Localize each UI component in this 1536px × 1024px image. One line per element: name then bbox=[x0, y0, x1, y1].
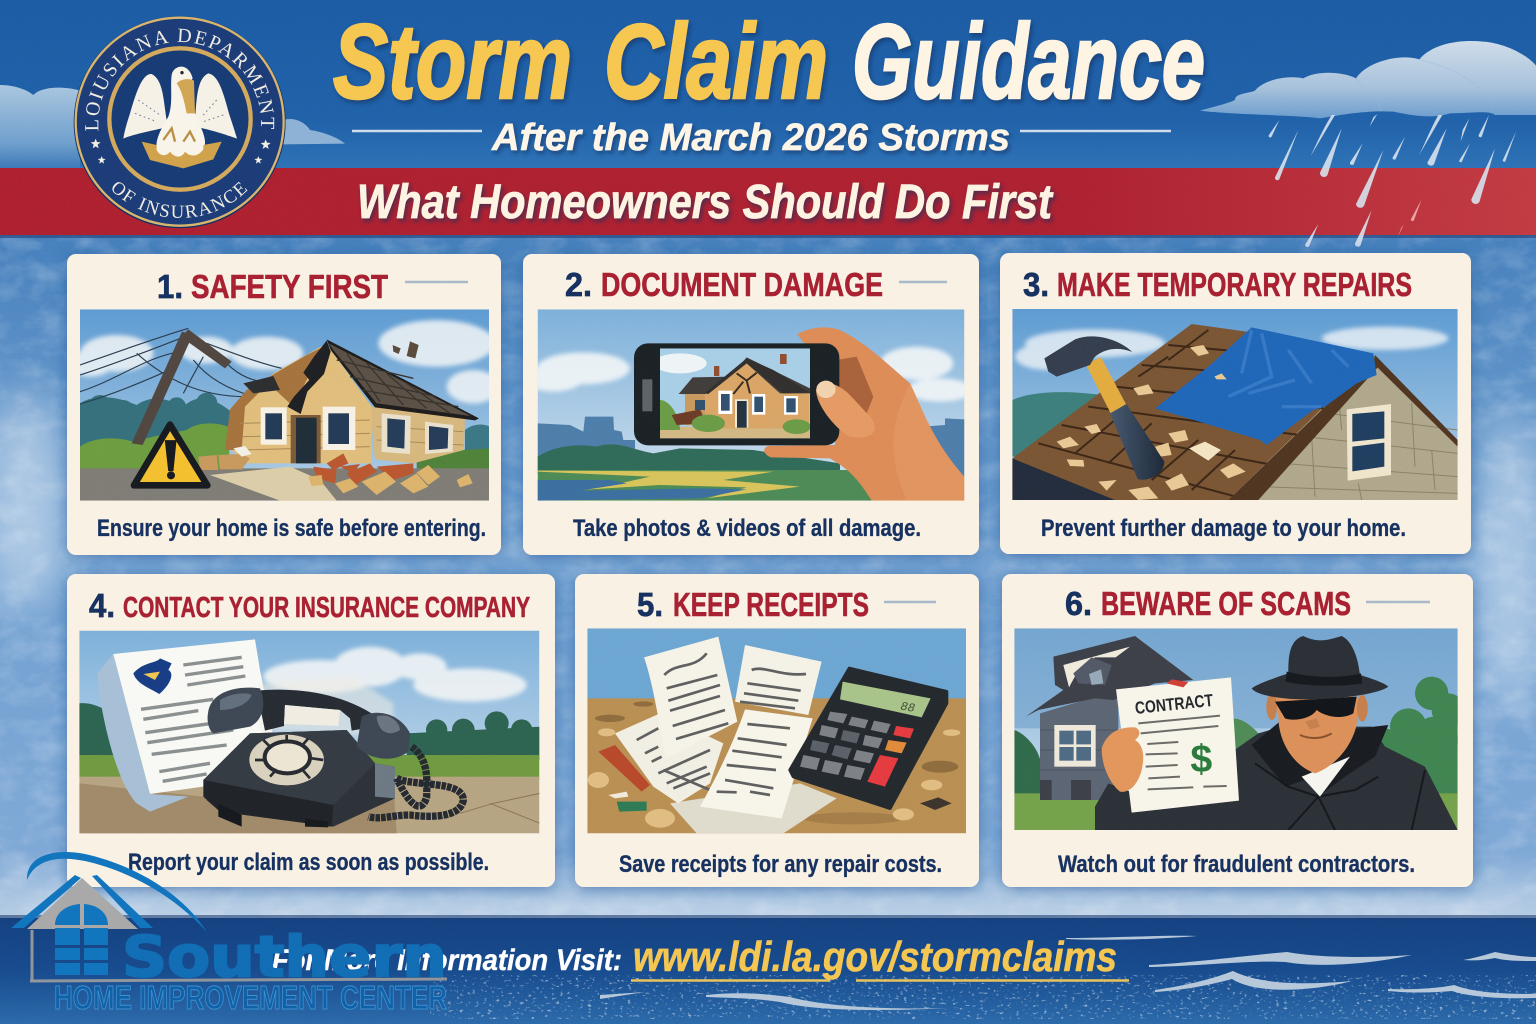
panel 6 heading: 6. bbox=[1065, 585, 1092, 622]
calculator bbox=[790, 668, 947, 808]
title word: Claim: Claim bbox=[604, 3, 828, 121]
footer: website call to action: www.ldi.la.gov/stormclaims bbox=[633, 933, 1117, 980]
phone bbox=[634, 343, 839, 445]
icon: warning triangle bbox=[134, 425, 207, 485]
panel 5 caption: Save receipts for any repair costs. bbox=[619, 851, 942, 878]
panel 4 heading: CONTACT YOUR INSURANCE COMPANY bbox=[123, 592, 530, 624]
blue tarp bbox=[1155, 327, 1377, 445]
panel 3 caption: Prevent further damage to your home. bbox=[1041, 515, 1406, 542]
house bbox=[1026, 636, 1193, 800]
panel 1: Safety First bbox=[67, 254, 501, 555]
panel 2 caption: Take photos & videos of all damage. bbox=[573, 515, 921, 542]
hand bbox=[764, 327, 964, 501]
panel 6 heading: BEWARE OF SCAMS bbox=[1101, 585, 1351, 622]
subtitle with side rules: After the March 2026 Storms bbox=[491, 117, 1010, 159]
panel 5 heading: 5. bbox=[637, 586, 663, 623]
contract document: $ bbox=[1190, 737, 1212, 781]
rotary telephone bbox=[203, 677, 463, 827]
logo: Southern Home Improvement Center bbox=[11, 852, 447, 1016]
panel 2 heading: 2. bbox=[565, 266, 592, 303]
logo swoosh bbox=[27, 852, 207, 932]
title bbox=[333, 3, 1205, 121]
title word: Storm: Storm bbox=[333, 3, 572, 121]
icon: hammer bbox=[1044, 336, 1164, 480]
house bbox=[225, 339, 479, 463]
rain drops bbox=[1269, 114, 1516, 247]
footer: website call to action bbox=[272, 933, 1129, 980]
panel 3 heading: MAKE TEMPORARY REPAIRS bbox=[1057, 266, 1412, 303]
panel 5 heading: KEEP RECEIPTS bbox=[673, 586, 869, 623]
title word: Guidance: Guidance bbox=[852, 3, 1205, 121]
panel 2 heading: DOCUMENT DAMAGE bbox=[601, 266, 883, 303]
calculator: 88 bbox=[899, 699, 916, 716]
panel 2: Document Damage bbox=[523, 254, 979, 555]
panel 4 heading: 4. bbox=[89, 587, 115, 624]
hand thumb bbox=[816, 381, 875, 437]
panel 1 heading: SAFETY FIRST bbox=[191, 268, 388, 305]
illustration: receipts and calculator bbox=[587, 628, 966, 833]
illustration: hand photographing house on phone bbox=[523, 309, 973, 501]
logo wordmark: Southern bbox=[122, 925, 447, 990]
logo tagline: HOME IMPROVEMENT CENTER bbox=[54, 979, 447, 1016]
illustration: rotary telephone and insurance papers bbox=[79, 631, 540, 833]
seal lettering: top arc: LOIUSIANA DEPARMENT bbox=[85, 28, 274, 131]
seal stars bbox=[91, 139, 271, 164]
contract document: CONTRACT bbox=[1134, 690, 1214, 718]
gable wall and window bbox=[1225, 355, 1458, 500]
panel 4: Contact Your Insurance Company bbox=[67, 574, 555, 887]
panel 3 heading: 3. bbox=[1023, 266, 1049, 303]
panel 1 heading: 1. bbox=[157, 268, 183, 305]
rubble bbox=[198, 446, 473, 495]
insurance documents bbox=[97, 639, 273, 812]
panel 3: Make Temporary Repairs bbox=[1000, 253, 1471, 554]
panel 5: Keep Receipts bbox=[575, 574, 979, 887]
panel 4 heading bbox=[89, 587, 530, 624]
man in coat, hat and sunglasses bbox=[1095, 636, 1458, 830]
header cloud: right rain cloud bbox=[1200, 41, 1536, 118]
panel 6 caption: Watch out for fraudulent contractors. bbox=[1058, 851, 1415, 878]
red ribbon banner bbox=[0, 168, 1536, 238]
seal lettering: bottom arc: OF INSURANCE bbox=[112, 182, 248, 218]
illustration: scammer with contract bbox=[1014, 628, 1465, 830]
utility pole and wires bbox=[80, 328, 282, 445]
footer: website call to action: For More Information Visit: bbox=[272, 944, 622, 977]
panel 6: Beware of Scams bbox=[1002, 574, 1473, 887]
receipts bbox=[615, 637, 822, 818]
icon: pelican bbox=[123, 67, 237, 168]
contract document bbox=[1116, 677, 1239, 813]
footer: sea band bbox=[0, 915, 1536, 1024]
damaged roof bbox=[1012, 324, 1378, 500]
panel 1 caption: Ensure your home is safe before entering. bbox=[97, 515, 486, 542]
seal: Louisiana Department of Insurance bbox=[74, 16, 286, 228]
logo house bbox=[11, 875, 447, 982]
illustration: tarp on roof and hammer bbox=[1012, 309, 1458, 500]
hand holding contract bbox=[1102, 727, 1143, 792]
ribbon heading: What Homeowners Should Do First bbox=[357, 176, 1054, 229]
header cloud: left bbox=[0, 85, 345, 168]
illustration: damaged house and warning sign bbox=[67, 309, 500, 501]
panel 4 caption: Report your claim as soon as possible. bbox=[128, 849, 489, 876]
